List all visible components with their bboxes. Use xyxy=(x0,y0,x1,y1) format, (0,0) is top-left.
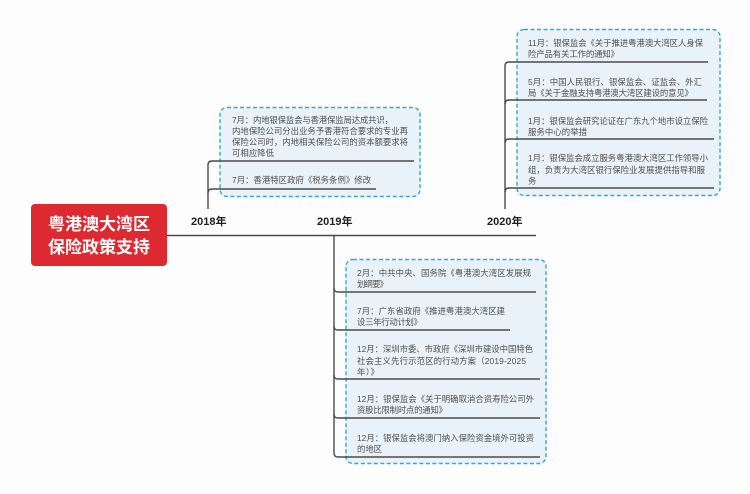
panel: 2019 policies: 设三年行动计划》 xyxy=(357,317,422,327)
panel: 2019 policies: 7月：广东省政府《推进粤港澳大湾区建 xyxy=(357,306,506,316)
panel: 2018 policies xyxy=(208,108,420,209)
panel: 2019 policies: 划纲要》 xyxy=(357,279,388,289)
panel: 2020 policies: 5月：中国人民银行、银保监会、证监会、外汇 xyxy=(528,77,702,87)
panel: 2019 policies: 2月：中共中央、国务院《粤港澳大湾区发展规 xyxy=(357,268,532,278)
central topic: title: 保险政策支持 xyxy=(48,237,150,257)
panel: 2020 policies: 1月：银保监会研究论证在广东九个地市设立保险 xyxy=(528,116,709,126)
panel: 2020 policies: 局《关于金融支持粤港澳大湾区建设的意见》 xyxy=(528,88,693,98)
panel: 2018 policies: 7月：内地银保监会与香港保监局达成共识， xyxy=(232,115,393,125)
panel: 2020 policies: 险产品有关工作的通知》 xyxy=(528,49,619,59)
panel: 2018 policies: 内地保险公司分出业务予香港符合要求的专业再 xyxy=(232,126,409,136)
panel: 2020 policies: 组，负责为大湾区银行保险业发展提供指导和服 xyxy=(528,165,706,175)
panel: 2019 policies: 12月：深圳市委、市政府《深圳市建设中国特色 xyxy=(357,344,534,354)
panel: 2019 policies: 社会主义先行示范区的行动方案（2019-2025 xyxy=(357,356,526,366)
timeline axis xyxy=(166,234,536,236)
year label: 2018: 2018年 xyxy=(191,214,226,228)
central topic: title: 粤港澳大湾区 xyxy=(48,214,150,234)
panel: 2019 policies: 12月：银保监会将澳门纳入保险资金境外可投资 xyxy=(357,433,534,443)
panel: 2018 policies: 可相应降低 xyxy=(232,148,275,158)
central topic: title xyxy=(31,204,167,266)
panel: 2019 policies: 年）》 xyxy=(357,367,379,377)
panel: 2019 policies: 12月：银保监会《关于明确取消合资寿险公司外 xyxy=(357,394,535,404)
year label: 2020: 2020年 xyxy=(487,214,522,228)
panel: 2018 policies: 7月：香港特区政府《税务条例》修改 xyxy=(232,175,372,185)
panel: 2019 policies: 资股比限制时点的通知》 xyxy=(357,405,447,415)
panel: 2020 policies: 务 xyxy=(528,176,537,186)
panel: 2018 policies: 保险公司时，内地相关保险公司的资本额要求将 xyxy=(232,137,408,147)
year label: 2019: 2019年 xyxy=(317,214,352,228)
panel: 2020 policies xyxy=(505,30,720,209)
panel: 2020 policies: 1月：银保监会成立服务粤港澳大湾区工作领导小 xyxy=(528,153,709,163)
panel: 2020 policies: 服务中心的举措 xyxy=(528,127,588,137)
panel: 2020 policies: 11月：银保监会《关于推进粤港澳大湾区人身保 xyxy=(528,38,704,48)
panel: 2019 policies xyxy=(334,236,546,464)
panel: 2019 policies: 的地区 xyxy=(357,444,382,454)
